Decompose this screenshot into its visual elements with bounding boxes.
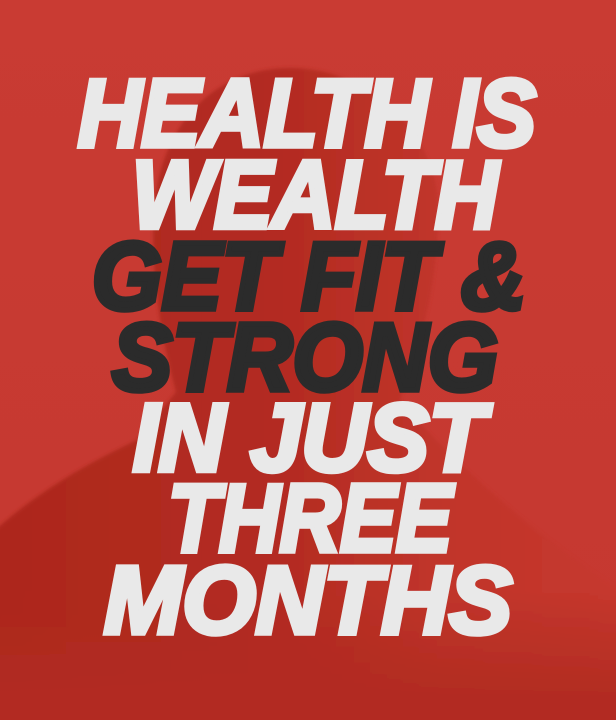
line: MONTHS: MONTHS (104, 547, 512, 654)
line: WEALTH: WEALTH (132, 142, 500, 248)
line: STRONG: STRONG (112, 304, 498, 411)
line: THREE: THREE (168, 465, 455, 572)
line: GET FIT &: GET FIT & (92, 223, 526, 330)
headline (78, 60, 536, 654)
line: HEALTH IS: HEALTH IS (78, 60, 536, 167)
line: IN JUST: IN JUST (133, 384, 492, 492)
